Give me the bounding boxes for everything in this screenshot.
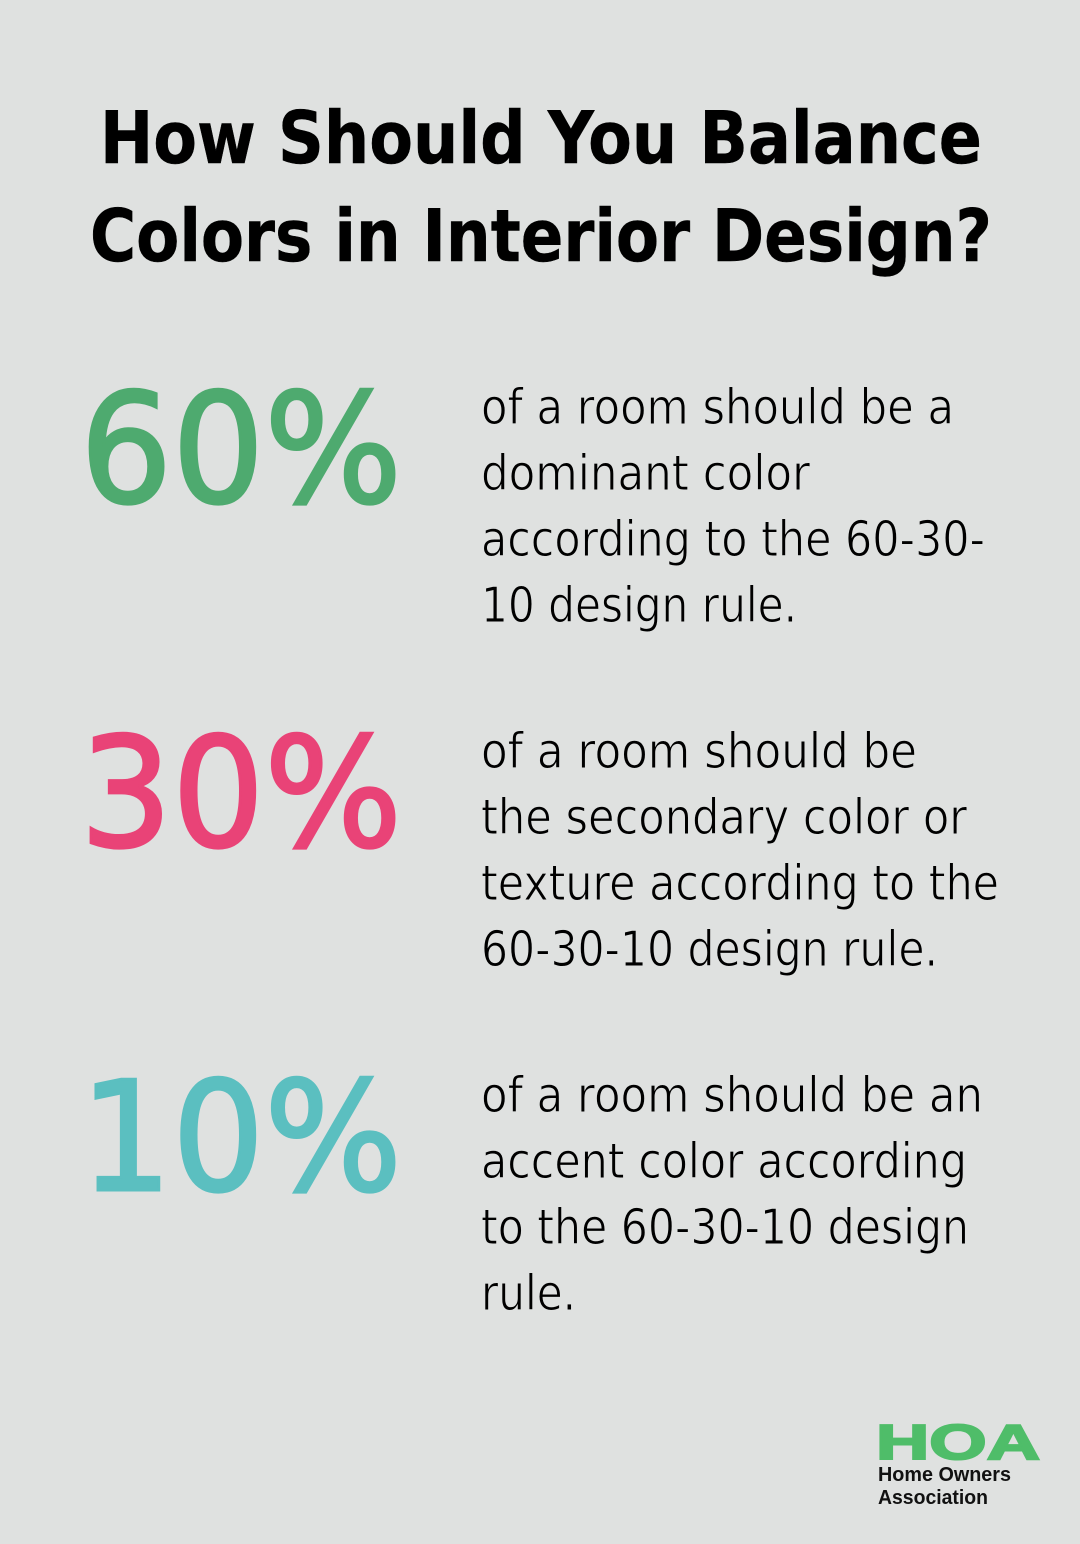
title: How Should You Balance — [100, 96, 982, 180]
panel: 60 percent stat — [80, 361, 985, 634]
logo: Home Owners Association: Home Owners — [878, 1464, 1011, 1486]
stat number: 30%: 30% — [80, 705, 402, 882]
text block: 30 percent description — [481, 723, 999, 978]
logo: Home Owners Association: HOA — [876, 1416, 1040, 1470]
stat number: 60%: 60% — [80, 361, 402, 538]
text block: 10 percent description: to the 60-30-10 design — [481, 1199, 969, 1256]
text block: 10 percent description: accent color according — [481, 1133, 967, 1190]
stat number: 10%: 10% — [80, 1049, 402, 1226]
text block: 60 percent description: dominant color — [481, 445, 811, 502]
text block: 30 percent description: the secondary color or — [481, 789, 968, 846]
text block: 10 percent description: rule. — [481, 1265, 576, 1322]
title — [90, 96, 992, 278]
panel: 30 percent stat — [80, 705, 999, 978]
text block: 60 percent description: 10 design rule. — [481, 577, 797, 634]
logo: Home Owners Association — [876, 1416, 1040, 1509]
text block: 30 percent description: texture according to the — [481, 855, 999, 912]
text block: 30 percent description: 60-30-10 design rule. — [481, 921, 938, 978]
text block: 60 percent description — [481, 379, 985, 634]
text block: 10 percent description — [481, 1067, 983, 1322]
panel: 10 percent stat — [80, 1049, 983, 1322]
text block: 60 percent description: of a room should be a — [481, 379, 954, 436]
text block: 30 percent description: of a room should be — [481, 723, 917, 780]
text block: 60 percent description: according to the 60-30- — [481, 511, 985, 568]
logo: Home Owners Association: Association — [878, 1487, 988, 1509]
text block: 10 percent description: of a room should be an — [481, 1067, 983, 1124]
